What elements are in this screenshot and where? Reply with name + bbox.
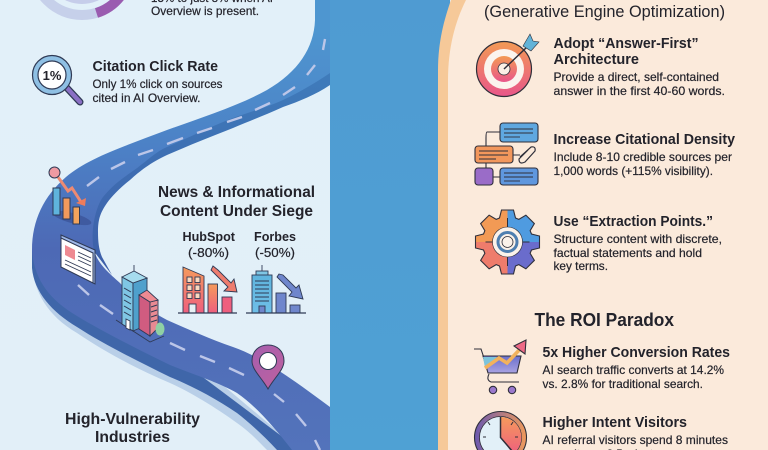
text: citation click rate xyxy=(92,59,222,105)
text: high-vulnerability industries: Industries xyxy=(95,429,170,446)
text: extraction points: key terms. xyxy=(554,259,608,273)
road xyxy=(32,0,330,450)
text: HubSpot label: (-80%) xyxy=(188,245,229,260)
icon: newspaper xyxy=(61,235,95,284)
text: answer-first: answer in the first 40-60 words. xyxy=(554,84,725,98)
text: higher intent visitors: AI referral visitors spend 8 minutes xyxy=(542,433,728,447)
text: extraction points: Structure content with discrete, xyxy=(554,232,722,246)
heading: The ROI Paradox: The ROI Paradox xyxy=(534,310,674,330)
text: click rate description xyxy=(151,0,273,18)
text: HubSpot label: HubSpot xyxy=(182,229,236,244)
icon: magnifier 1% xyxy=(32,56,80,102)
text: HubSpot label xyxy=(182,229,236,260)
icon: target with arrow xyxy=(476,34,539,96)
icon: city buildings on road xyxy=(116,265,164,342)
icon: linked citation boxes xyxy=(475,123,538,185)
text: high-vulnerability industries xyxy=(65,411,200,446)
text: citational density: Increase Citational Density xyxy=(554,131,736,148)
text: citation click rate: Citation Click Rate xyxy=(92,59,218,75)
text: click rate description: Overview is present. xyxy=(151,4,259,18)
panel: left background xyxy=(0,0,331,450)
text: high-vulnerability industries: High-Vulnerability xyxy=(65,411,200,428)
text: extraction points xyxy=(554,213,722,273)
text: news heading: Content Under Siege xyxy=(160,203,313,220)
text: conversion rates: AI search traffic converts at 14.2% xyxy=(542,363,724,377)
text: answer-first xyxy=(554,35,725,98)
text: citational density: 1,000 words (+115% visibility). xyxy=(554,164,713,178)
icon: HubSpot decline chart xyxy=(178,266,237,313)
text: answer-first: Adopt “Answer-First” xyxy=(554,35,698,52)
panel: right orange edge xyxy=(438,0,768,450)
text: answer-first: Architecture xyxy=(554,51,639,68)
text: higher intent visitors xyxy=(542,414,728,450)
icon: clock xyxy=(474,412,526,450)
text: Forbes label: (-50%) xyxy=(255,245,295,260)
icon: gear xyxy=(474,209,540,275)
text: extraction points: Use “Extraction Points.” xyxy=(554,213,713,230)
icon: cart with rising arrow xyxy=(474,340,526,394)
text: news heading xyxy=(158,184,315,220)
text: Forbes label xyxy=(254,229,296,260)
icon: falling bar chart on road xyxy=(49,167,93,228)
text: answer-first: Provide a direct, self-contained xyxy=(554,70,719,84)
text: conversion rates: 5x Higher Conversion Rates xyxy=(542,344,730,361)
text: higher intent visitors: Higher Intent Visitors xyxy=(542,414,687,431)
icon: location pin xyxy=(252,345,284,389)
text: extraction points: factual statements and hold xyxy=(554,246,702,260)
text: conversion rates xyxy=(542,344,730,391)
text: news heading: News & Informational xyxy=(158,184,315,201)
text: citational density xyxy=(554,131,736,178)
panel: right cream background xyxy=(448,0,768,450)
text: conversion rates: vs. 2.8% for traditional search. xyxy=(542,377,703,391)
text: Forbes label: Forbes xyxy=(254,229,296,244)
icon: donut chart xyxy=(33,0,131,15)
icon: Forbes decline chart xyxy=(246,265,306,313)
icon: magnifier 1%: 1% xyxy=(43,68,62,83)
text: citation click rate: Only 1% click on sources xyxy=(92,77,222,91)
text: citational density: Include 8-10 credible sources per xyxy=(554,150,732,164)
heading: GEO subtitle: (Generative Engine Optimization) xyxy=(484,2,725,21)
panel: blue divider band xyxy=(330,0,450,450)
text: citation click rate: cited in AI Overview. xyxy=(92,91,200,105)
